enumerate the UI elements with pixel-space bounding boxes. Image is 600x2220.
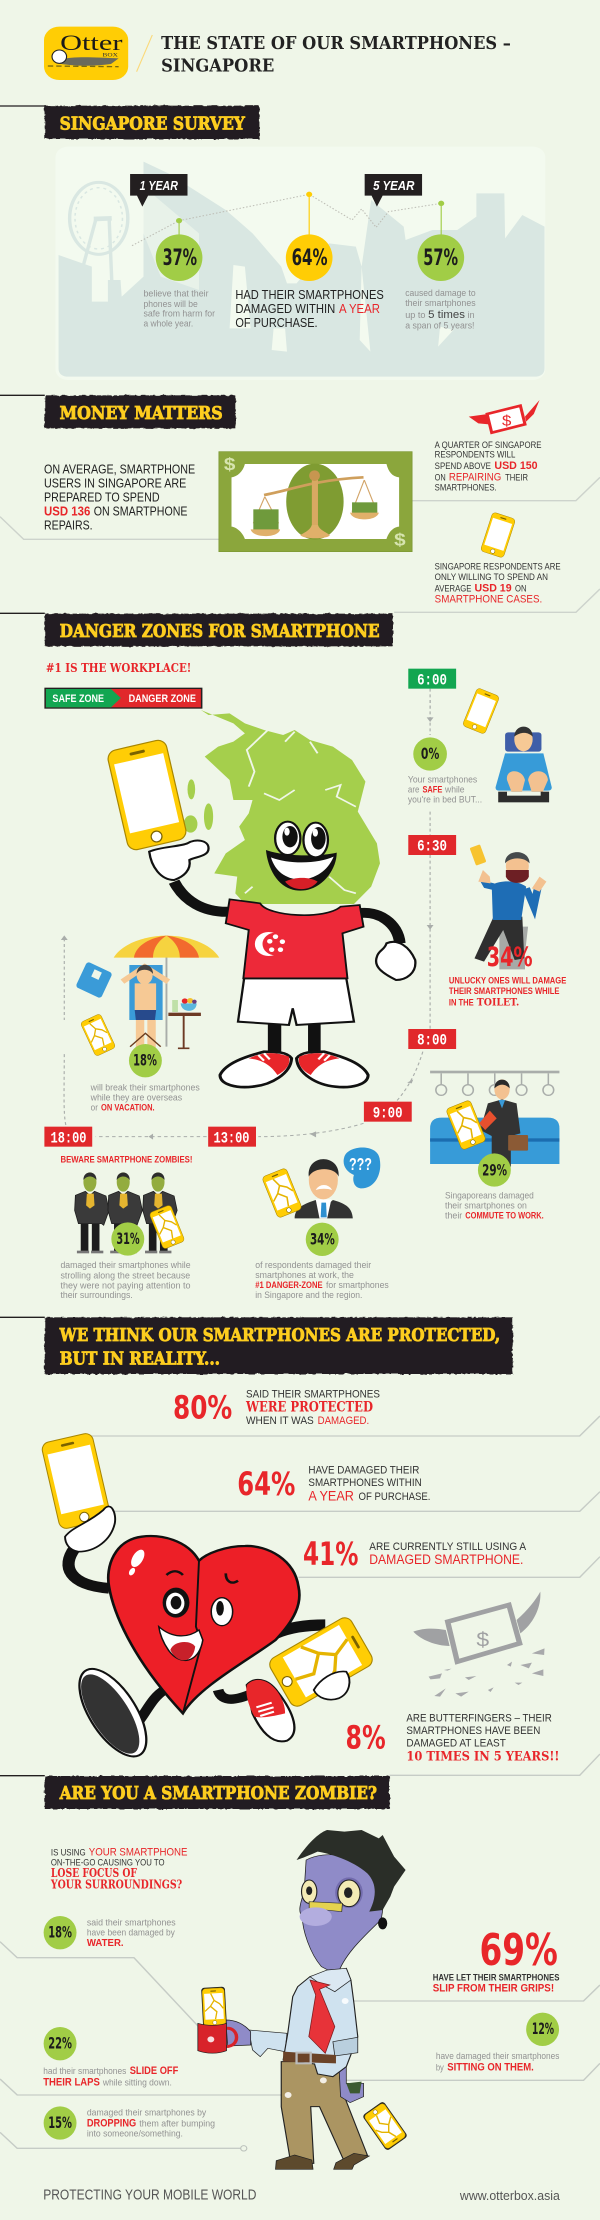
stat: 12% sitting: SITTING ON THEM. [447,2062,534,2073]
shoes [220,1052,368,1087]
stat: 15% dropping: into someone/something. [87,2129,183,2139]
heading: Danger Zones [0,613,393,646]
stat: 41% [303,1536,527,1573]
stat: 80%: 80% [173,1390,232,1427]
stat: 41%: 41% [303,1536,359,1573]
heading: Danger Zones: DANGER ZONES FOR SMARTPHONE [60,621,380,642]
icon: cracked phone zombie [149,1205,185,1249]
icon: cracked phone in mug [201,1987,227,2027]
face [266,822,337,891]
icon: cracked phone commute [446,1100,486,1150]
stat: 57%: 57% [423,245,458,271]
heading: Are You a Smartphone Zombie: ARE YOU A SMARTPHONE ZOMBIE? [59,1783,377,1804]
illustration: person on toilet [474,852,546,969]
illustration: vacation [114,936,219,1050]
stat: 0% safe in bed: you're in bed BUT... [408,795,482,805]
stat: 64% [237,1463,430,1504]
stat: 22% laps: THEIR LAPS [43,2077,100,2088]
stat: 64%: HAD THEIR SMARTPHONES [235,288,384,302]
logo: OtterBox [44,27,128,80]
stat: 18% water: WATER. [87,1938,124,1949]
stat: 22% laps: 22% [48,2035,72,2053]
stat: 64%: A YEAR [339,302,380,316]
illustration: dollar bill with scale: $ [224,454,236,475]
icon: phone at 6:00 [462,688,500,734]
stat: 18% vacation: will break their smartphones [90,1083,200,1093]
stat: 31% zombies: strolling along the street because [60,1271,191,1281]
stat: 31% zombies: damaged their smartphones while [60,1261,191,1271]
panel: danger zones [44,662,567,1301]
logo: OtterBox: Otter [60,31,123,56]
stat: 64%: 64% [237,1466,295,1503]
heading: Are You a Smartphone Zombie [0,1776,390,1809]
stat: 12% sitting [436,2013,559,2073]
mascot: heart character [41,1432,375,1765]
time: 18:00: 18:00 [51,1129,86,1147]
text: average spend: USD 136 [44,504,91,518]
illustration: smartphone zombies: BEWARE SMARTPHONE ZOMBIES! [60,1155,192,1165]
question text: LOSE FOCUS OF [51,1867,137,1881]
time: 8:00: 8:00 [417,1032,447,1049]
illustration: office worker with question bubble: ??? [349,1154,372,1175]
footer: PROTECTING YOUR MOBILE WORLD [43,2187,256,2203]
time: 6:00: 6:00 [417,672,447,689]
header [44,27,511,80]
icon: falling phone [470,844,486,866]
limbs [69,1548,325,1720]
text: case spend: SMARTPHONE CASES. [435,592,542,605]
stat: 57%: up to [405,311,426,321]
stat: 34% work [255,1223,389,1301]
icon: gray winged bill: $ [476,1629,489,1651]
stat: 80% [173,1387,380,1427]
text: repairing spend: A QUARTER OF SINGAPORE [435,441,542,451]
stat: 18% water: said their smartphones [87,1918,176,1928]
question text: IS USING [51,1848,86,1858]
panel: survey [55,147,545,380]
footer [43,2187,560,2203]
stat: 15% dropping: them after bumping [139,2119,215,2129]
stat: 69% grips [433,1925,560,1994]
time: 13:00 [208,1127,256,1147]
text: repairing spend: THEIR [505,473,528,483]
text: average spend: REPAIRS. [44,518,93,532]
stat: 18% vacation: ON VACATION. [101,1103,155,1113]
stat: 0% safe in bed: are [408,785,420,795]
stat: 34% toilet: IN THE [449,998,474,1008]
icon: cracked phone vacation [80,1013,116,1057]
stat: 37%: believe that their [143,289,209,299]
subheading: workplace: #1 IS THE WORKPLACE! [46,662,191,676]
stat: 80%: SAID THEIR SMARTPHONES [246,1387,380,1400]
time: 9:00 [364,1102,412,1122]
stat: 18% vacation [90,1044,200,1113]
stat: 29% commute: their smartphones on [445,1201,527,1211]
stat: 80%: WHEN IT WAS [246,1414,314,1427]
stat: 57%: caused damage to [405,289,476,299]
panel: money matters [0,400,600,612]
stat: 22% laps [43,2027,178,2088]
tag: 1 year [130,174,187,207]
stat: 34% work: smartphones at work, the [255,1271,354,1281]
stat: 12% sitting: by [436,2063,444,2073]
stat: 22% laps: SLIDE OFF [130,2066,178,2077]
legend: safe and danger zone: SAFE ZONE [52,692,104,705]
stat: 34% work: 34% [310,1230,335,1249]
tag: 5 year [365,174,422,207]
time: 6:30 [408,835,456,855]
stat: 64% [235,234,384,330]
stat: 31% zombies: they were not paying attention to [60,1281,191,1291]
text: repairing spend: REPAIRING [449,470,501,483]
icon: winged red bill [469,400,540,433]
illustration: office worker with question bubble [295,1147,380,1218]
illustration: zombie character [226,1830,406,2169]
stat: 34% toilet [449,941,567,1008]
stat: 8%: 8% [346,1720,386,1757]
text: average spend: USERS IN SINGAPORE ARE [44,476,186,490]
text: case spend: ONLY WILLING TO SPEND AN [435,573,548,583]
raised glove [65,1506,115,1552]
legend: safe and danger zone: DANGER ZONE [129,692,196,705]
stat: 34% work: #1 DANGER-ZONE [255,1281,323,1291]
stat: 0% safe in bed [408,737,482,805]
stat: 64%: OF PURCHASE. [359,1490,430,1503]
title: SINGAPORE [161,55,274,76]
stat: 22% laps: had their smartphones [43,2067,126,2077]
question text: YOUR SURROUNDINGS? [50,1878,182,1892]
icon: cracked phone office [262,1168,302,1218]
title [161,32,511,76]
heading: Money Matters: MONEY MATTERS [60,403,223,424]
cracked phone in hand [267,1615,375,1709]
text: repairing spend: RESPONDENTS WILL [435,450,516,460]
stat: 29% commute: 29% [482,1161,507,1180]
stat: 41%: DAMAGED SMARTPHONE. [369,1552,523,1568]
panel: protected stats [41,1387,600,1775]
stat: 37% [143,234,216,329]
stat: 57%: their smartphones [405,299,476,309]
stat: 57% [405,234,476,331]
stat: 64%: SMARTPHONES WITHIN [308,1476,422,1489]
stat: 64%: DAMAGED WITHIN [235,302,335,316]
stat: 18% water: 18% [48,1923,72,1942]
stat: 34% work: in Singapore and the region. [255,1291,362,1301]
icon: gray winged bill [413,1592,540,1662]
stat: 0% safe in bed: while [444,785,465,795]
icon: suitcase [75,961,113,999]
stat: 34% work: of respondents damaged their [255,1261,372,1271]
text: repairing spend: SMARTPHONES. [435,483,497,493]
stat: 41%: ARE CURRENTLY STILL USING A [369,1540,527,1553]
stat: 34% toilet: 34% [487,941,533,972]
phone raised [41,1432,111,1530]
divider slash [137,35,152,72]
stat: 18% vacation: while they are overseas [90,1093,182,1103]
icon: dropped phone [362,2101,408,2151]
text: repairing spend [435,441,542,493]
illustration: dollar bill with scale: $ [394,530,406,550]
stat: 18% vacation: or [91,1103,98,1113]
stat: 15% dropping: DROPPING [87,2118,136,2129]
time: 9:00: 9:00 [373,1104,403,1122]
phone held by mascot [106,739,188,851]
question text: ON-THE-GO CAUSING YOU TO [51,1858,165,1868]
stat: 37%: phones will be [143,300,198,310]
time: 6:30: 6:30 [417,838,447,855]
illustration: smartphone zombies [60,1155,192,1253]
stat: 31% zombies: their surroundings. [60,1291,133,1301]
text: repairing spend: SPEND ABOVE [435,462,491,472]
stat: 0% safe in bed: Your smartphones [408,775,477,785]
panel: zombie [0,1830,600,2169]
connector lines [0,1942,600,2148]
gloves [149,841,415,980]
stat: 8%: ARE BUTTERFINGERS – THEIR [406,1711,552,1724]
title: THE STATE OF OUR SMARTPHONES – [161,32,511,54]
stat: 8%: DAMAGED AT LEAST [406,1736,506,1749]
text: repairing spend: ON [435,473,446,483]
stat: 57%: 5 times [428,310,465,321]
stat: 18% water [44,1916,176,1949]
stat: 12% sitting: 12% [532,2020,554,2039]
time: 8:00 [408,1029,456,1049]
icon: winged red bill: $ [502,413,512,429]
time: 6:00 [408,669,456,689]
skyline background [55,147,545,380]
shirt and shorts [226,899,364,1025]
heading: Money Matters [0,395,235,428]
footer: www.otterbox.asia [459,2189,560,2203]
stat: 18% vacation: 18% [133,1051,157,1070]
stat: 64%: A YEAR [308,1488,354,1504]
stat: 15% dropping: damaged their smartphones by [87,2108,206,2118]
connector dots [241,1998,349,2151]
text: case spend: ON [515,584,527,594]
stat: 80%: DAMAGED. [318,1414,369,1427]
lower glove [314,1671,349,1700]
arms and legs [174,882,400,1055]
time: 13:00: 13:00 [214,1129,249,1147]
stat: 29% commute: COMMUTE TO WORK. [465,1211,544,1221]
trend line [132,192,444,246]
stat: 18% water: have been damaged by [87,1928,175,1938]
text: average spend [44,462,195,532]
icon: red mug [198,2023,227,2053]
connector lines [90,1416,600,1577]
illustration: sleeping person [496,727,552,802]
text: average spend: ON AVERAGE, SMARTPHONE [44,462,195,476]
stat: 57%: in [468,311,474,321]
heading: protected but in reality: BUT IN REALITY... [60,1349,220,1369]
stat: 69% grips: 69% [479,1925,558,1975]
legend: safe and danger zone [44,688,202,709]
text: case spend [435,562,561,605]
question text [50,1845,187,1892]
time: 18:00 [44,1127,92,1147]
connector lines [0,477,600,612]
stat: 64%: 64% [292,245,328,271]
stat: 37%: 37% [163,245,197,271]
stat: 37%: a whole year. [143,319,193,329]
text: average spend: PREPARED TO SPEND [44,490,160,504]
text: repairing spend: USD 150 [494,459,538,472]
stat: 80%: WERE PROTECTED [245,1399,373,1415]
stat: 15% dropping [44,2106,215,2140]
stat: 37%: safe from harm for [143,309,216,319]
heading: Singapore Survey: SINGAPORE SURVEY [60,114,245,134]
text: average spend: ON SMARTPHONE [94,504,187,518]
stat: 34% work: for smartphones [326,1281,389,1291]
stat: 12% sitting: have damaged their smartphones [436,2052,559,2062]
stat: 64%: HAVE DAMAGED THEIR [308,1463,420,1476]
stat: 29% commute [445,1153,544,1221]
stat: 8%: SMARTPHONES HAVE BEEN [406,1724,540,1737]
stat: 31% zombies: 31% [116,1230,140,1249]
stat: 29% commute: Singaporeans damaged [445,1191,534,1201]
stat: 8% [346,1711,600,1775]
stat: 69% grips: SLIP FROM THEIR GRIPS! [433,1983,554,1994]
stat: 29% commute: their [445,1211,463,1221]
text: case spend: USD 19 [474,581,512,594]
stat: 34% toilet: TOILET. [477,995,519,1008]
tag: 5 year: 5 YEAR [373,179,415,193]
heart body [108,1536,299,1713]
stat: 34% toilet: THEIR SMARTPHONES WHILE [449,987,560,997]
stat: 15% dropping: 15% [48,2114,72,2133]
timeline path [61,689,434,1140]
stat: 0% safe in bed: SAFE [422,785,443,795]
illustration: train commute [430,1071,559,1167]
stat: 57%: a span of 5 years! [405,321,474,331]
heading: Singapore Survey [0,106,259,139]
shoes [66,1660,294,1765]
text: case spend: AVERAGE [435,584,472,594]
logo: OtterBox: BOX [103,53,119,58]
stat: 31% zombies [60,1222,191,1301]
icon: paper shards [429,1648,545,1697]
question text: YOUR SMARTPHONE [89,1845,187,1858]
icon: phone [480,512,516,558]
stat: 64%: OF PURCHASE. [235,316,318,330]
island head [184,710,380,904]
stat: 0% safe in bed: 0% [421,745,439,764]
tag: 1 year: 1 YEAR [140,179,178,193]
stat: 22% laps: while sitting down. [102,2078,172,2088]
heading: protected but in reality [0,1317,513,1374]
illustration: dollar bill with scale [219,452,412,552]
mascot: Singapore island character [106,710,415,1087]
